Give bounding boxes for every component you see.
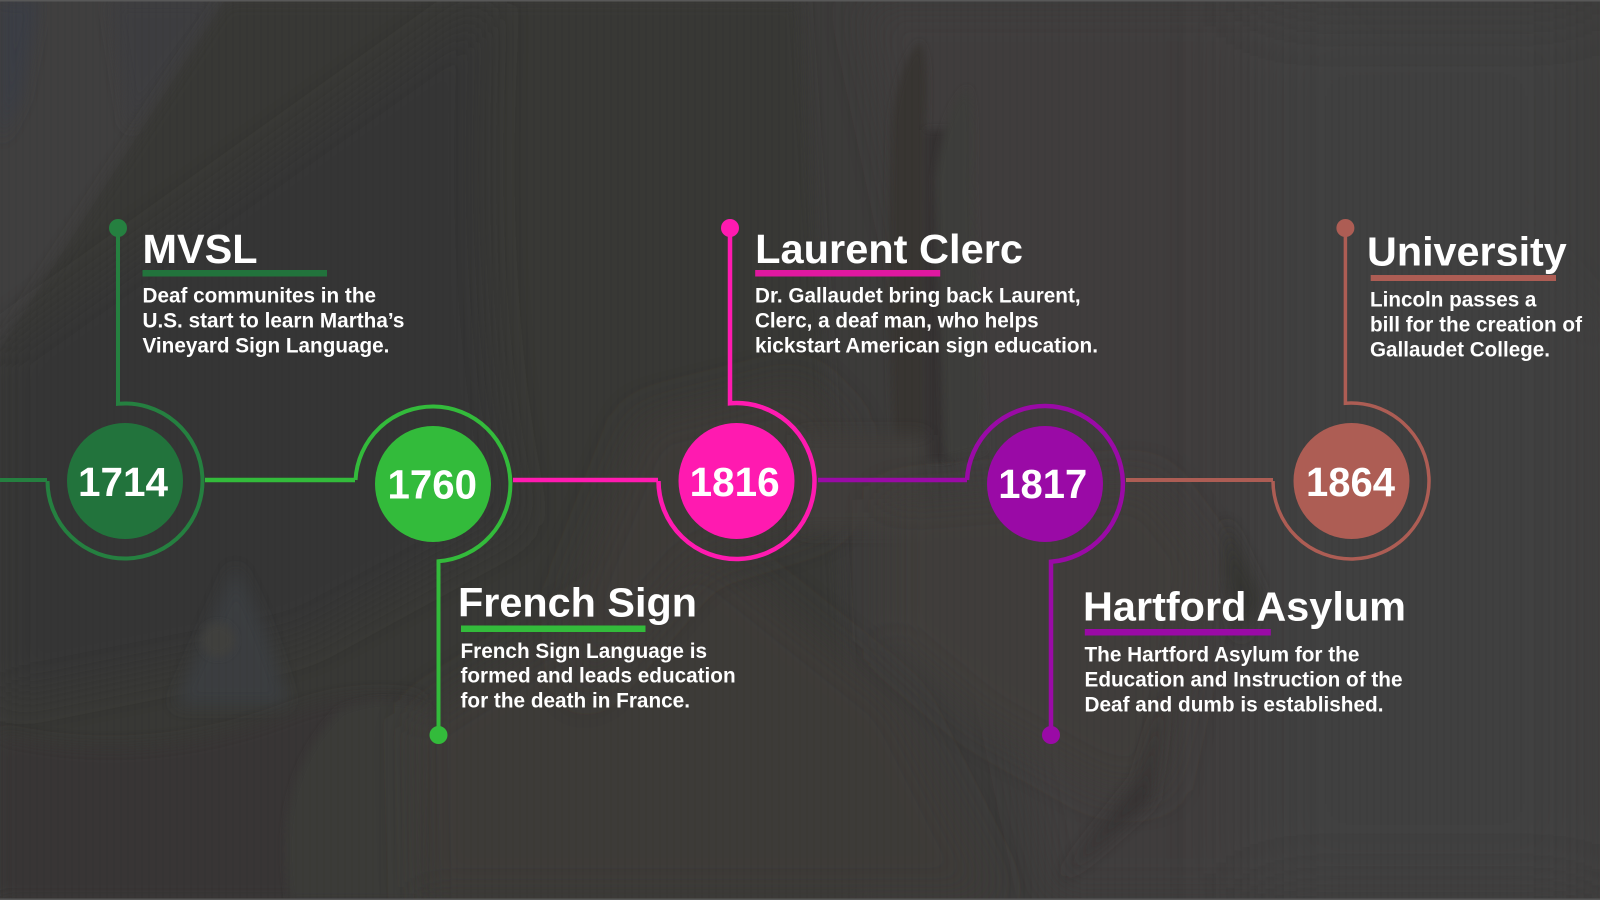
description: formed and leads education: [460, 665, 736, 688]
connector line 1816 to 1817: [818, 478, 967, 482]
heading: MVSL: [142, 226, 258, 272]
year disc: [678, 423, 794, 539]
description: Dr. Gallaudet bring back Laurent,: [755, 285, 1081, 308]
year label: 1864: [1306, 459, 1395, 505]
description: The Hartford Asylum for the: [1084, 644, 1359, 667]
connector line 1817 to 1864: [1126, 478, 1273, 482]
connector line from left edge to 1714: [0, 478, 47, 482]
description: for the death in France.: [460, 689, 690, 712]
milestone: 1714 MVSL: [48, 219, 404, 558]
ring and stem: [48, 228, 202, 558]
connector line 1760 to 1816: [513, 478, 658, 482]
description: Vineyard Sign Language.: [142, 334, 389, 357]
description: kickstart American sign education.: [755, 334, 1098, 357]
milestone: 1864 University: [1273, 219, 1583, 559]
heading: French Sign: [458, 580, 697, 626]
year disc: [67, 423, 183, 539]
year label: 1714: [78, 459, 168, 505]
ring and stem: [1273, 228, 1429, 559]
year disc: [375, 426, 491, 542]
heading: Hartford Asylum: [1083, 584, 1406, 630]
milestone: 1760 French Sign: [356, 407, 736, 744]
description: Lincoln passes a: [1370, 289, 1537, 312]
description: Gallaudet College.: [1370, 339, 1550, 362]
heading underline: [1085, 629, 1271, 636]
heading: University: [1367, 229, 1567, 275]
milestone: 1816 Laurent Clerc: [658, 219, 1098, 559]
description: U.S. start to learn Martha’s: [142, 310, 404, 333]
stem end dot: [109, 219, 127, 237]
description: [460, 640, 736, 712]
heading underline: [142, 270, 327, 276]
description: Education and Instruction of the: [1084, 669, 1402, 692]
description: [142, 285, 404, 357]
description: [1370, 289, 1583, 362]
description: [1084, 644, 1402, 716]
stem end dot: [430, 726, 448, 744]
year label: 1817: [998, 461, 1087, 507]
ring and stem: [356, 407, 510, 735]
stem end dot: [1042, 726, 1060, 744]
description: Deaf and dumb is established.: [1084, 693, 1384, 716]
ring and stem: [658, 228, 814, 559]
connector line 1714 to 1760: [205, 478, 355, 482]
heading underline: [1371, 275, 1556, 281]
heading: Laurent Clerc: [755, 226, 1023, 272]
year label: 1816: [690, 459, 780, 505]
description: [755, 285, 1098, 357]
ring and stem: [967, 406, 1123, 735]
description: Clerc, a deaf man, who helps: [755, 310, 1039, 333]
description: French Sign Language is: [460, 640, 707, 663]
description: bill for the creation of: [1370, 314, 1583, 337]
heading underline: [755, 270, 940, 276]
heading underline: [461, 626, 646, 632]
stem end dot: [1336, 219, 1354, 237]
year disc: [1294, 423, 1410, 539]
fingers: [889, 42, 927, 450]
milestone: 1817 Hartford Asylum: [967, 406, 1406, 744]
year disc: [987, 426, 1103, 542]
stem end dot: [721, 219, 739, 237]
description: Deaf communites in the: [142, 285, 376, 308]
year label: 1760: [388, 462, 477, 508]
